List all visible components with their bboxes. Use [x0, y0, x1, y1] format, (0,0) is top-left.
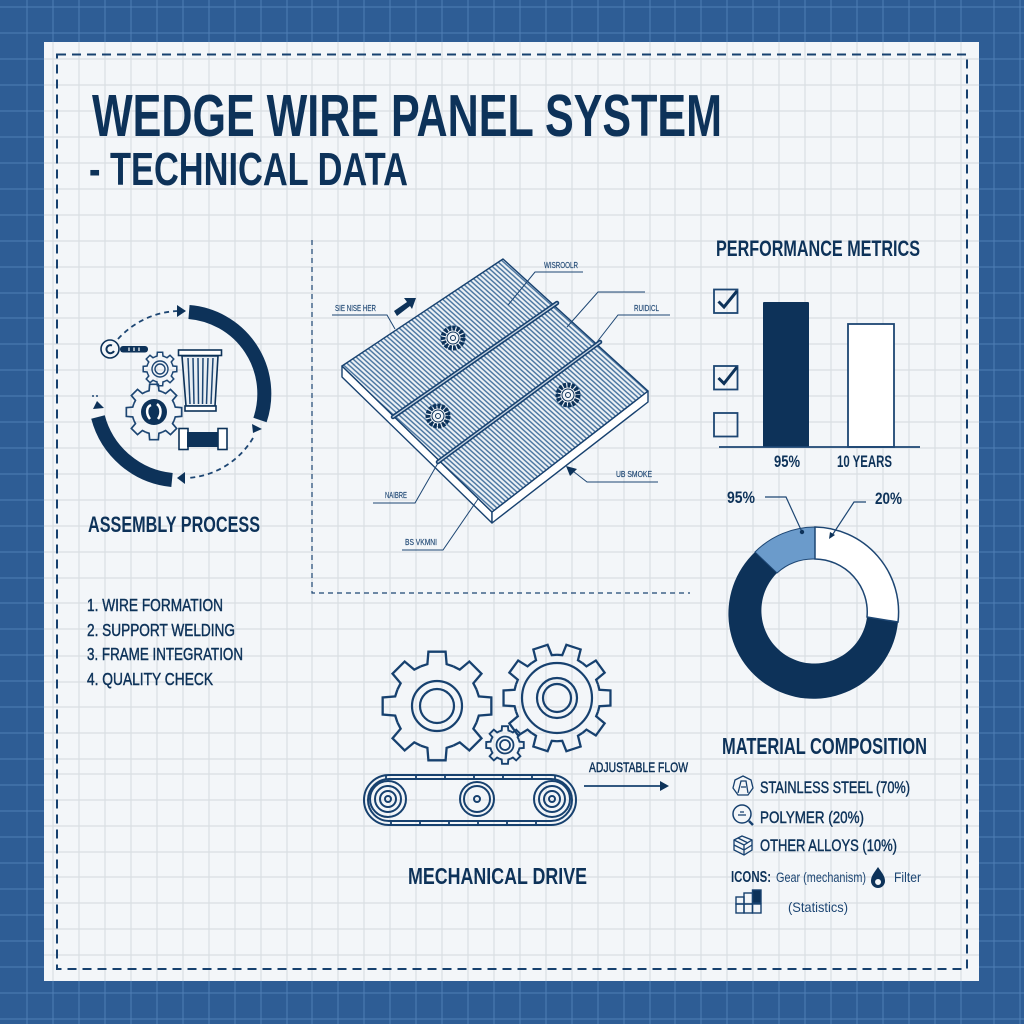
heading: performance metrics: PERFORMANCE METRICS — [716, 236, 920, 261]
icon: water drop — [871, 867, 885, 888]
panel: material composition — [722, 733, 927, 915]
icon legend: Gear (mechanism) — [776, 869, 866, 885]
callout labels: UB SMOKE — [616, 470, 652, 479]
icon: stainless steel — [733, 776, 753, 795]
icon: polymer magnifier — [733, 805, 753, 825]
process cycle arrows — [92, 305, 264, 484]
dashed border — [57, 54, 967, 969]
panel: mechanical drive — [364, 643, 689, 889]
callout labels: BS VKMNI — [405, 538, 437, 547]
icon: wrench — [101, 340, 148, 358]
icon: statistics — [736, 890, 761, 913]
panel: isometric wedge wire panel — [312, 240, 690, 593]
callout labels: SIE NISE HER — [335, 304, 376, 313]
assembly steps list — [87, 595, 243, 689]
donut chart — [727, 488, 902, 699]
callout labels: NAIBRE — [385, 491, 407, 500]
assembly steps list: 1. WIRE FORMATION — [87, 595, 223, 615]
icon legend: Filter — [894, 869, 921, 885]
title: - TECHNICAL DATA — [89, 143, 408, 195]
arrow: flow — [584, 781, 669, 791]
donut labels: 20% — [875, 489, 902, 508]
icon legend: (Statistics) — [788, 899, 848, 915]
icon: large gear — [126, 384, 182, 440]
heading: mechanical drive: MECHANICAL DRIVE — [408, 863, 587, 889]
assembly steps list: 2. SUPPORT WELDING — [87, 620, 235, 640]
bar chart: 95% — [774, 452, 800, 471]
checkboxes — [714, 290, 738, 436]
assembly steps list: 4. QUALITY CHECK — [87, 669, 213, 689]
callout labels — [335, 261, 659, 547]
assembly steps list: 3. FRAME INTEGRATION — [87, 644, 243, 664]
icon: small gear — [143, 352, 177, 386]
heading: assembly process: ASSEMBLY PROCESS — [88, 512, 260, 537]
icon legend — [731, 867, 921, 915]
material: other alloys: OTHER ALLOYS (10%) — [760, 837, 897, 855]
material: stainless steel: STAINLESS STEEL (70%) — [760, 779, 910, 797]
wire panel body — [342, 259, 648, 523]
panel: assembly process — [87, 305, 264, 689]
conveyor belt — [364, 775, 576, 825]
support rails — [393, 303, 600, 462]
donut labels: 95% — [727, 488, 755, 507]
donut labels — [727, 488, 902, 539]
title — [89, 83, 722, 195]
bar chart: 10 YEARS — [837, 452, 892, 471]
material: polymer: POLYMER (20%) — [760, 809, 864, 827]
panel gears — [428, 328, 578, 426]
callout labels: RUIDICL — [634, 304, 659, 313]
heading: material composition: MATERIAL COMPOSITION — [722, 733, 927, 759]
callout labels: WISROOLR — [544, 261, 578, 270]
callout leaders — [332, 272, 670, 550]
title: WEDGE WIRE PANEL SYSTEM — [92, 83, 722, 149]
icon: pipe coupling — [179, 428, 227, 450]
icon: other alloys — [734, 836, 752, 855]
icon: filter cartridge — [178, 350, 222, 411]
flow arrow — [394, 298, 416, 316]
icon legend: ICONS: — [731, 869, 771, 886]
adjustable flow label: ADJUSTABLE FLOW — [589, 759, 689, 775]
bar chart — [719, 302, 920, 471]
gear train — [383, 643, 610, 764]
panel: performance metrics — [714, 236, 920, 471]
